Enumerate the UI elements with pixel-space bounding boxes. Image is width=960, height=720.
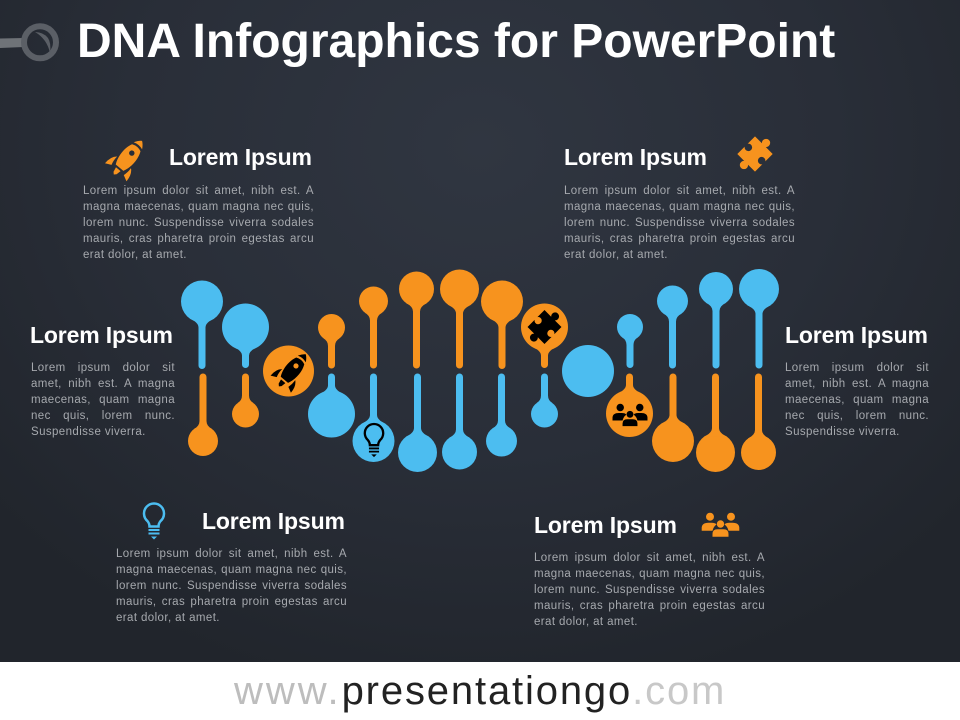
text block: mauris, cras pharetra proin egestas arcu — [83, 233, 314, 245]
panel: bottom right — [534, 512, 765, 628]
icon: logo ring — [0, 23, 59, 62]
heading: Lorem Ipsum — [564, 144, 707, 170]
text block: lorem nunc. Suspendisse viverra sodales — [534, 584, 765, 596]
heading: Lorem Ipsum — [202, 508, 345, 534]
text block: erat dolor, at amet. — [534, 616, 638, 628]
text block: Lorem ipsum dolor sit amet, nibh est. A — [534, 552, 765, 564]
text block: magna maecenas, quam magna nec quis, — [534, 568, 765, 580]
text block — [785, 362, 929, 438]
text block: Lorem ipsum dolor sit amet, nibh est. A — [83, 185, 314, 197]
text block: amet, nibh est. A magna — [785, 378, 929, 390]
panel: bottom left — [116, 502, 347, 624]
text block — [83, 185, 314, 261]
icon: bulb on node — [365, 424, 383, 457]
heading: Lorem Ipsum — [785, 322, 928, 348]
icon: puzzle on node — [523, 305, 566, 349]
orange centre circle — [263, 346, 314, 396]
text block — [534, 552, 765, 628]
text block: Lorem ipsum dolor sit amet, nibh est. A — [564, 185, 795, 197]
blue centre circle — [562, 345, 614, 397]
bottom strand — [188, 374, 776, 472]
text block — [564, 185, 795, 261]
title: DNA Infographics for PowerPoint — [77, 15, 835, 68]
icon: rocket on node — [269, 346, 316, 395]
text block: mauris, cras pharetra proin egestas arcu — [564, 233, 795, 245]
text block: magna maecenas, quam magna nec quis, — [83, 201, 314, 213]
icon: rocket — [105, 140, 143, 182]
text block: magna maecenas, quam magna nec quis, — [116, 564, 347, 576]
heading: Lorem Ipsum — [534, 512, 677, 538]
text block — [31, 362, 175, 438]
icon: people — [702, 512, 740, 537]
text block: Lorem ipsum dolor sit — [31, 362, 175, 374]
heading: Lorem Ipsum — [169, 144, 312, 170]
text block: erat dolor, at amet. — [116, 612, 220, 624]
text block: mauris, cras pharetra proin egestas arcu — [534, 600, 765, 612]
text block: nec quis, lorem nunc. — [785, 410, 929, 422]
text block: nec quis, lorem nunc. — [31, 410, 175, 422]
text block: maecenas, quam magna — [785, 394, 929, 406]
top strand — [181, 269, 779, 369]
text block: lorem nunc. Suspendisse viverra sodales — [83, 217, 314, 229]
panel: top left — [83, 140, 314, 261]
text block: amet, nibh est. A magna — [31, 378, 175, 390]
panel: middle left — [30, 322, 175, 438]
text block: magna maecenas, quam magna nec quis, — [564, 201, 795, 213]
text block: maecenas, quam magna — [31, 394, 175, 406]
icon: people on node — [613, 404, 647, 426]
text block: lorem nunc. Suspendisse viverra sodales — [564, 217, 795, 229]
text block — [116, 548, 347, 624]
text block: Lorem ipsum dolor sit — [785, 362, 929, 374]
text block: erat dolor, at amet. — [83, 249, 187, 261]
icon: bulb — [142, 502, 166, 540]
heading: Lorem Ipsum — [30, 322, 173, 348]
panel: middle right — [785, 322, 929, 438]
footer url: www.presentationgo.com — [234, 669, 726, 713]
panel: top right — [564, 136, 795, 261]
icon: puzzle — [737, 136, 773, 172]
text block: erat dolor, at amet. — [564, 249, 668, 261]
text block: Suspendisse viverra. — [785, 426, 900, 438]
text block: mauris, cras pharetra proin egestas arcu — [116, 596, 347, 608]
text block: lorem nunc. Suspendisse viverra sodales — [116, 580, 347, 592]
text block: Lorem ipsum dolor sit amet, nibh est. A — [116, 548, 347, 560]
text block: Suspendisse viverra. — [31, 426, 146, 438]
